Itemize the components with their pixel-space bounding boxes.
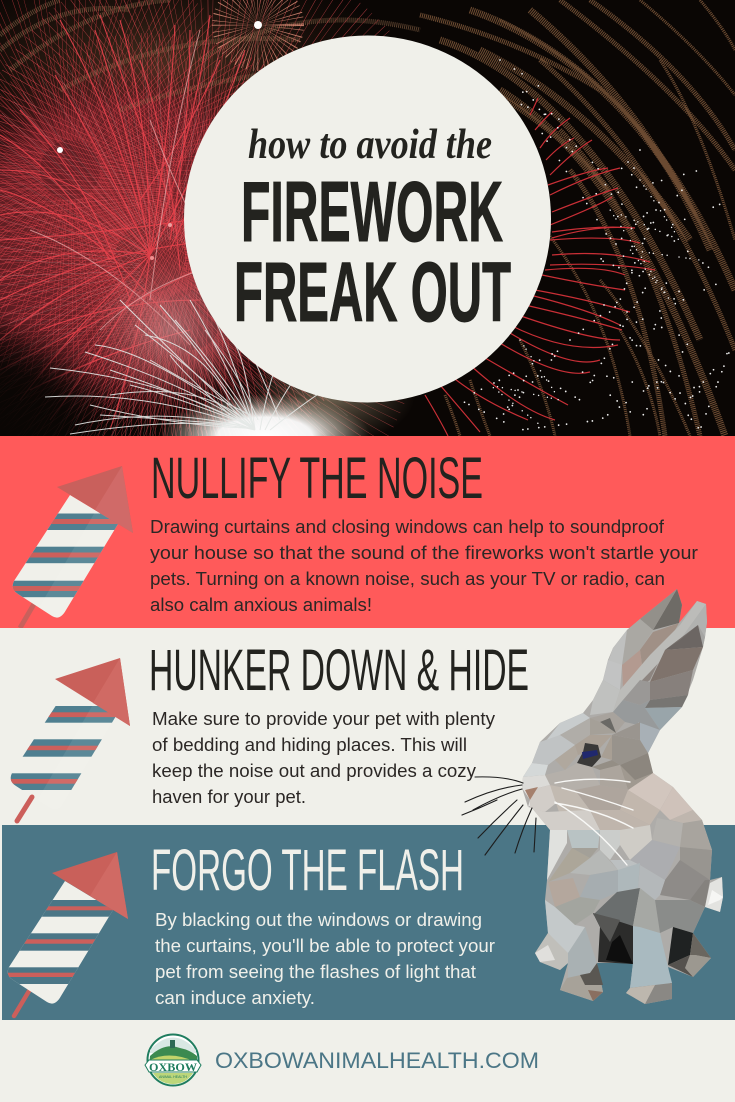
- heading: NULLIFY THE NOISE: [151, 446, 483, 511]
- body text: can induce anxiety.: [155, 988, 315, 1008]
- body text: pets. Turning on a known noise, such as your TV or radio, can: [150, 569, 665, 589]
- icon: rocket 3: [8, 852, 128, 1018]
- rabbit ears: [590, 589, 707, 753]
- footer url: OXBOWANIMALHEALTH.COM: [215, 1048, 539, 1073]
- red hair strokes: [0, 15, 260, 430]
- illustration: low-poly rabbit: [462, 589, 723, 1004]
- left red burst spokes: [20, 128, 280, 388]
- body text: [150, 517, 698, 615]
- golden and white glow: [254, 372, 406, 436]
- body text: your house so that the sound of the fireworks won't startle your: [150, 543, 698, 563]
- panel: forgo the flash: [0, 825, 735, 1020]
- panel: title circle: [184, 36, 551, 402]
- body text: haven for your pet.: [152, 787, 306, 807]
- body text: keep the noise out and provides a cozy: [152, 761, 476, 781]
- body text: Drawing curtains and closing windows can help to soundproof: [150, 517, 665, 537]
- rabbit silhouette: [522, 589, 723, 1004]
- logo: oxbow: ANIMAL HEALTH: [159, 1074, 187, 1079]
- icon: rocket 2: [10, 658, 130, 824]
- right red rays: [425, 98, 655, 436]
- rabbit head: [522, 712, 653, 815]
- white burst strokes: [45, 300, 317, 434]
- panel: nullify the noise: [0, 436, 735, 640]
- body text: also calm anxious animals!: [150, 595, 372, 615]
- star dots: [460, 60, 730, 430]
- bottom-left darkness: [0, 320, 116, 436]
- subtitle script: how to avoid the: [248, 122, 492, 168]
- body text: pet from seeing the flashes of light that: [155, 962, 476, 982]
- rabbit body: [532, 773, 712, 1001]
- body text: the curtains, you'll be able to protect your: [155, 936, 495, 956]
- rabbit tail: [705, 877, 723, 912]
- body text: Make sure to provide your pet with plenty: [152, 709, 495, 729]
- icon: rocket 1: [12, 466, 133, 628]
- logo: oxbow: OXBOW: [149, 1060, 197, 1074]
- logo: oxbow: [145, 1034, 201, 1086]
- heading: FORGO THE FLASH: [151, 838, 464, 903]
- body text: [152, 709, 495, 807]
- photo: fireworks background: [0, 0, 735, 436]
- title line 2: FREAK OUT: [234, 245, 511, 339]
- title line 1: FIREWORK: [241, 165, 503, 260]
- rabbit white whiskers: [555, 779, 633, 865]
- rabbit eye: [577, 743, 601, 767]
- rabbit belly and legs: [593, 880, 711, 1004]
- body text: By blacking out the windows or drawing: [155, 910, 482, 930]
- body text: of bedding and hiding places. This will: [152, 735, 467, 755]
- body text: [155, 910, 495, 1008]
- brown arcs on the right: [420, 0, 735, 436]
- logo banner: [145, 1060, 201, 1072]
- rabbit black whiskers: [462, 777, 536, 855]
- top burst: [233, 0, 283, 50]
- panel: hunker down and hide: [10, 628, 528, 824]
